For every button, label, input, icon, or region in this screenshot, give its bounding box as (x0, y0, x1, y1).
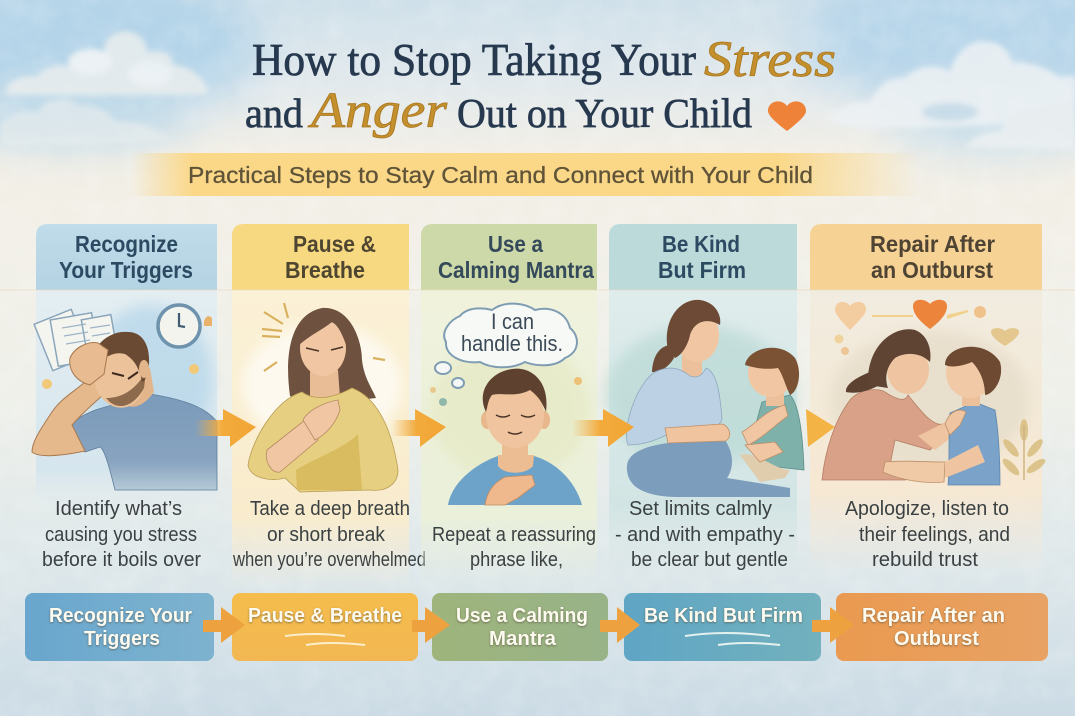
panel: repair after an outburst (810, 224, 1047, 575)
text: use a calming mantra description: Repeat a reassuring (432, 524, 596, 546)
subtitle band: Practical Steps to Stay Calm and Connect with Your Child (188, 162, 813, 188)
text: recognize your triggers description (42, 498, 201, 571)
title: and (245, 90, 303, 136)
panel heading: pause and breathe: Pause & (293, 231, 376, 257)
panel: recognize your triggers (32, 224, 217, 571)
button: use a calming mantra: Mantra (489, 628, 557, 650)
text: recognize your triggers description: causing you stress (45, 524, 197, 546)
illustration: mother talking to child (605, 300, 804, 497)
arrow: step 2 to 3 (392, 409, 446, 447)
callout: thought bubble: I can (491, 309, 534, 334)
button: recognize your triggers: Triggers (84, 628, 160, 650)
horizontal divider line (0, 289, 1075, 291)
subtitle band (130, 153, 920, 196)
panel: pause and breathe (232, 224, 426, 590)
button: pause and breathe (232, 593, 418, 661)
title (245, 32, 836, 139)
arrow: button 4 to 5 (812, 607, 854, 643)
button: recognize your triggers (25, 593, 214, 661)
title: Stress (704, 32, 836, 88)
arrow: button 3 to 4 (600, 607, 640, 643)
panel heading: repair after an outburst (810, 224, 1042, 290)
callout: thought bubble: handle this. (461, 331, 563, 356)
text: use a calming mantra description: phrase like, (470, 549, 563, 571)
panel: be kind but firm (605, 224, 804, 580)
text: recognize your triggers description: before it boils over (42, 549, 201, 571)
arrow: button 1 to 2 (203, 607, 245, 643)
panel heading: repair after an outburst: Repair After (870, 231, 995, 257)
panel heading: be kind but firm (609, 224, 797, 290)
illustration: woman breathing (242, 303, 402, 492)
panel heading: repair after an outburst: an Outburst (871, 257, 993, 283)
title: Out on Your Child (457, 90, 752, 136)
text: repair after an outburst description: Apologize, listen to (845, 498, 1009, 520)
button: be kind but firm: Be Kind But Firm (644, 605, 803, 627)
panel heading: use a calming mantra: Use a (488, 231, 543, 257)
title: Anger (308, 83, 447, 139)
text: pause and breathe description: Take a deep breath (250, 498, 410, 520)
arrow: step 3 to 4 (572, 409, 634, 447)
button: use a calming mantra (432, 593, 608, 661)
text: be kind but firm description: be clear but gentle (631, 549, 788, 571)
button: be kind but firm (624, 593, 821, 661)
text: repair after an outburst description: rebuild trust (872, 549, 978, 571)
button: use a calming mantra: Use a Calming (456, 605, 588, 627)
text: pause and breathe description: when you’re overwhelmed (232, 549, 426, 571)
panel heading: use a calming mantra (421, 224, 597, 290)
button: pause and breathe: Pause & Breathe (248, 605, 402, 627)
button: repair after an outburst: Repair After an (862, 605, 1005, 627)
text: be kind but firm description (615, 498, 795, 571)
button: repair after an outburst: Outburst (894, 628, 979, 650)
panel heading: be kind but firm: Be Kind (662, 231, 740, 257)
icon: heart in title (768, 101, 806, 131)
text: be kind but firm description: Set limits calmly (629, 498, 772, 520)
text: be kind but firm description: - and with empathy - (615, 524, 795, 546)
arrow: step 4 to 5 (806, 409, 835, 447)
arrow: button 2 to 3 (412, 607, 450, 643)
illustration: boy with thought bubble (430, 304, 590, 505)
panel heading: pause and breathe: Breathe (285, 257, 365, 283)
panel heading: recognize your triggers: Recognize (75, 231, 178, 257)
callout: thought bubble (435, 304, 577, 388)
text: repair after an outburst description (845, 498, 1010, 571)
text: pause and breathe description: or short break (267, 524, 386, 546)
button: repair after an outburst (836, 593, 1048, 661)
text: repair after an outburst description: their feelings, and (859, 524, 1010, 546)
text: recognize your triggers description: Identify what’s (55, 498, 182, 520)
panel: use a calming mantra (421, 224, 597, 590)
panel heading: use a calming mantra: Calming Mantra (438, 257, 594, 283)
panel heading: recognize your triggers: Your Triggers (59, 257, 193, 283)
arrow: step 1 to 2 (195, 409, 256, 447)
text: use a calming mantra description (432, 524, 596, 571)
panel heading: pause and breathe (232, 224, 409, 290)
clouds: top right (830, 41, 1075, 150)
panel heading: be kind but firm: But Firm (658, 257, 746, 283)
button: recognize your triggers: Recognize Your (49, 605, 192, 627)
illustration: mother and child reconnecting (822, 300, 1047, 485)
clouds: top left (0, 31, 209, 145)
panel heading: recognize your triggers (36, 224, 217, 290)
illustration: stressed man (32, 305, 217, 490)
title: How to Stop Taking Your (252, 35, 696, 85)
text: pause and breathe description (232, 498, 426, 571)
